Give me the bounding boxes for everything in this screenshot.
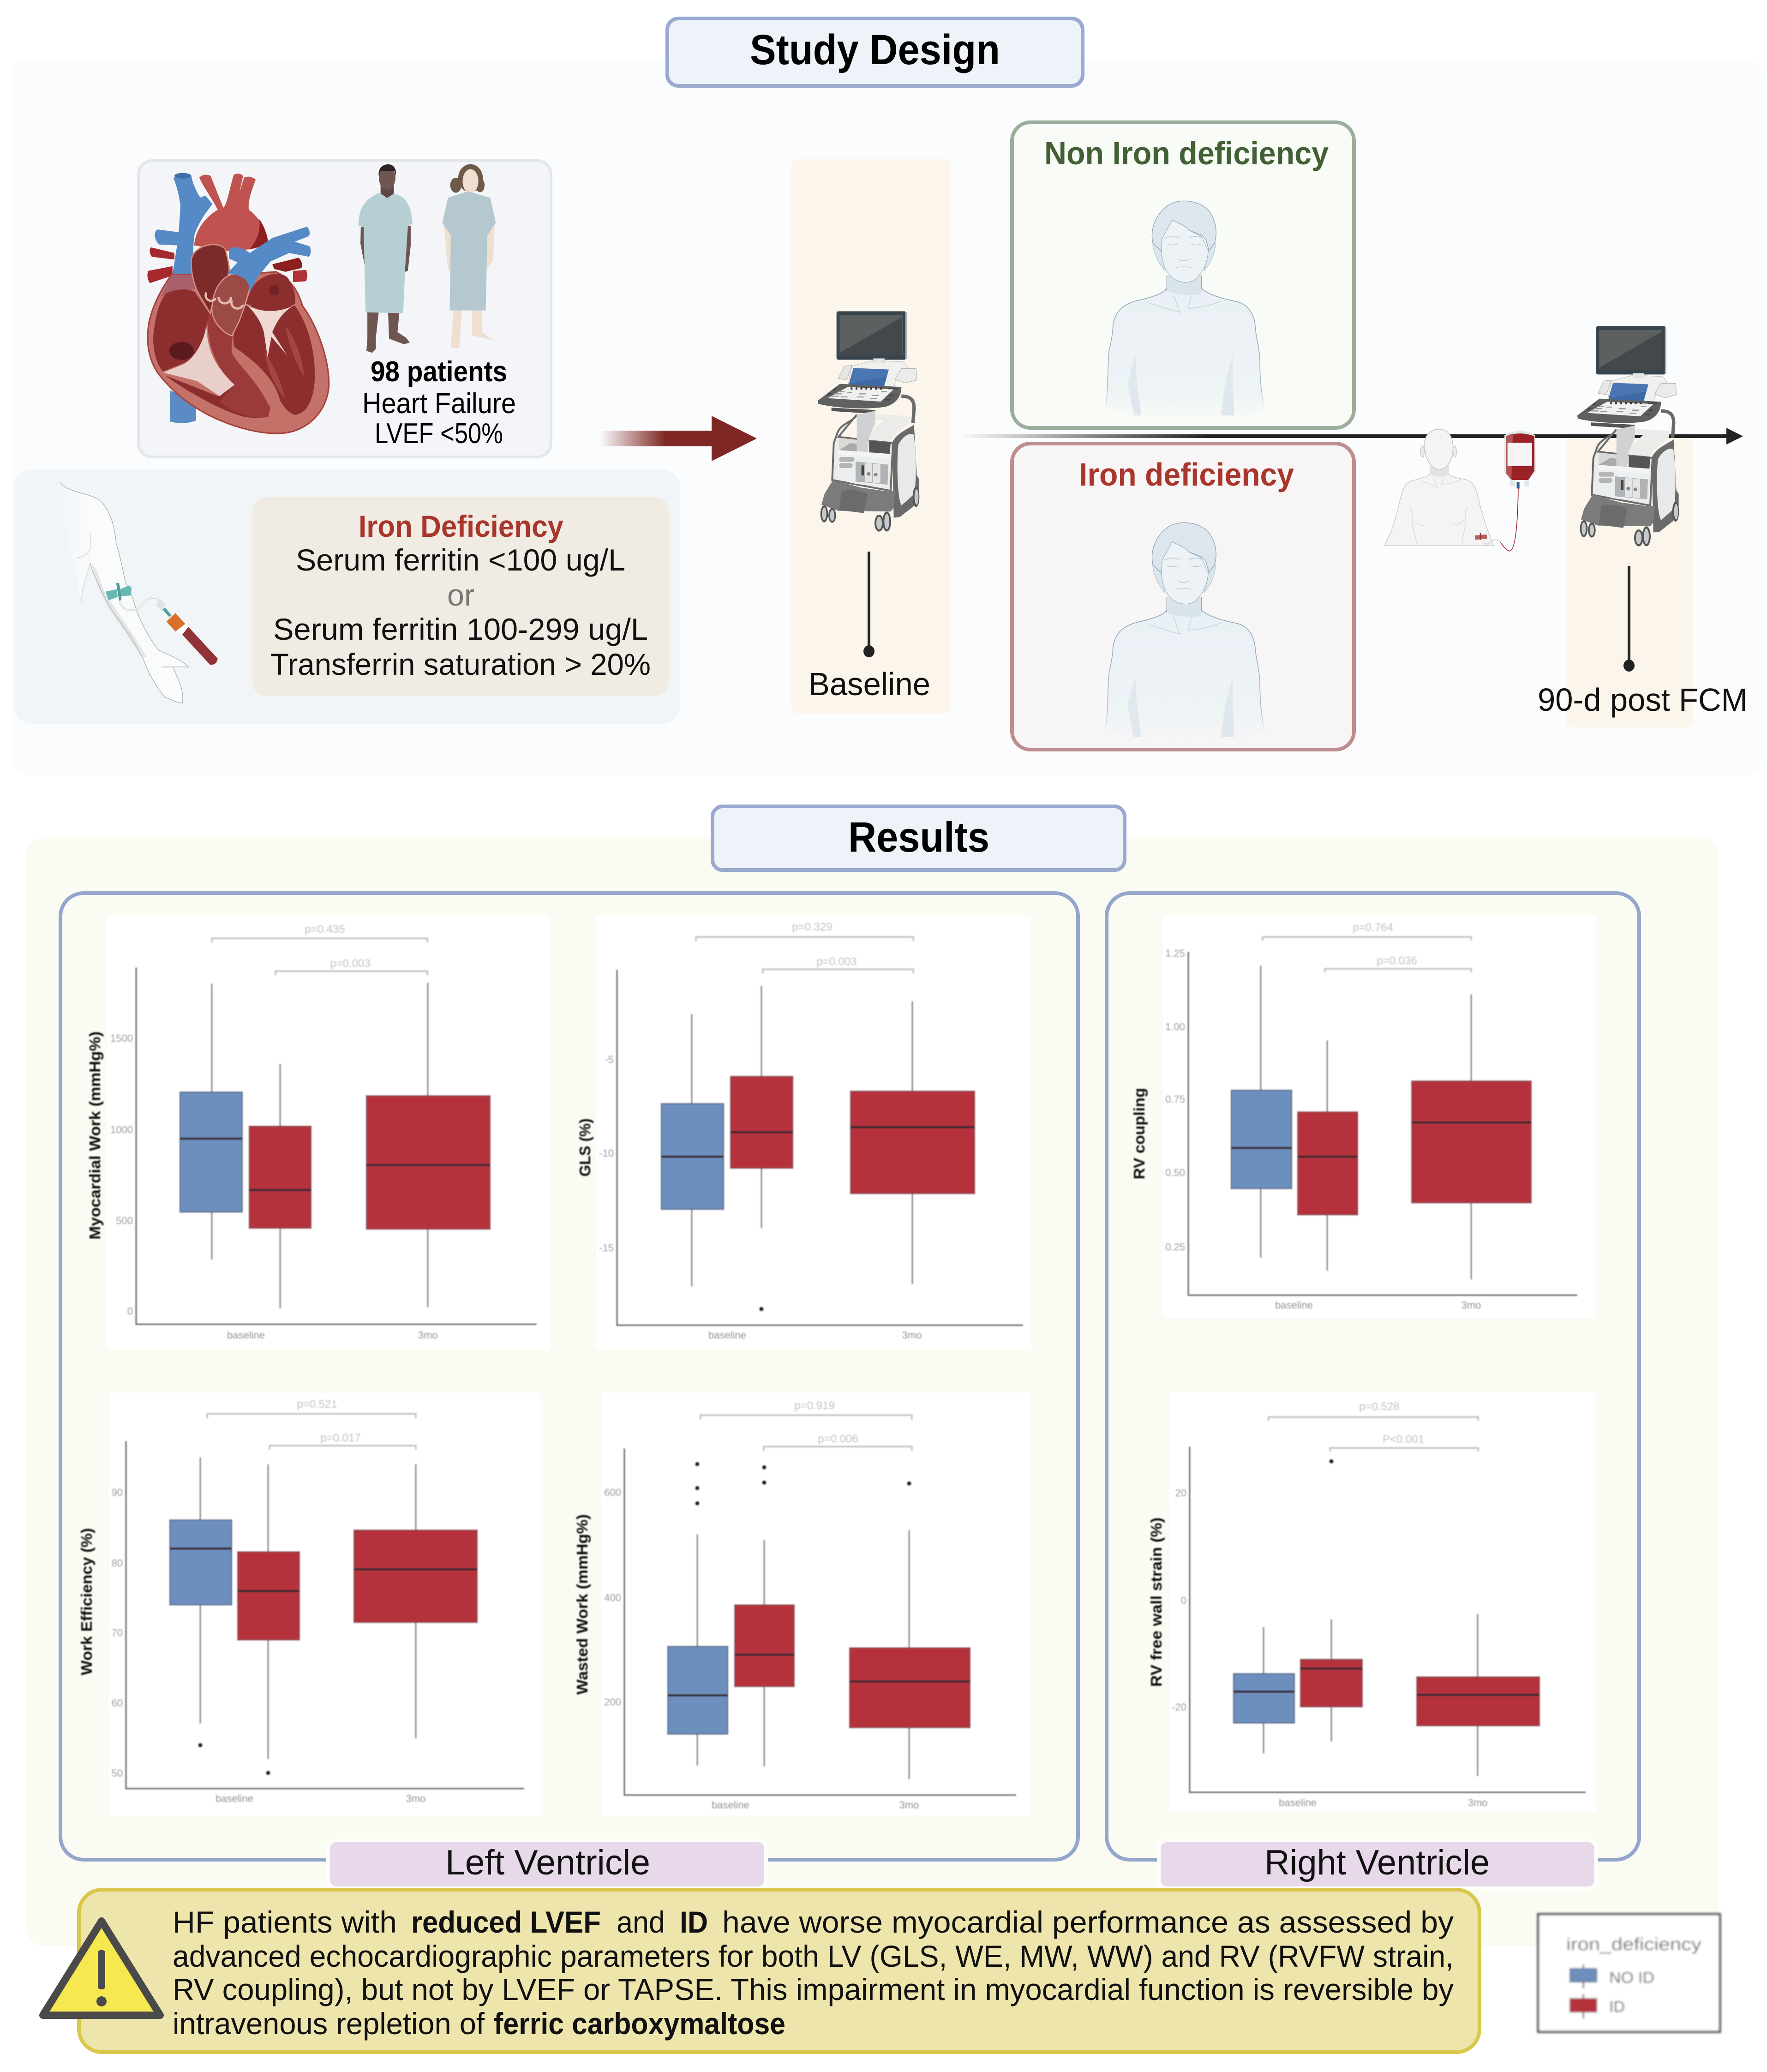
chart: work efficiency boxplot: 80 <box>112 1557 123 1569</box>
chart: myocardial work boxplot: 1000 <box>110 1124 133 1135</box>
chart: myocardial work boxplot: 0 <box>127 1305 133 1317</box>
chart: work efficiency boxplot: p=0.017 <box>320 1432 361 1444</box>
text: conclusion line 1: reduced LVEF <box>411 1905 601 1939</box>
chart: GLS boxplot: 3mo <box>902 1329 922 1341</box>
panel: iron deficiency group <box>1012 444 1354 750</box>
chart: GLS boxplot: GLS (%) <box>576 1118 593 1177</box>
chart: wasted work boxplot: p=0.006 <box>818 1433 858 1445</box>
panel: results background <box>26 837 1719 1946</box>
tag: Left Ventricle <box>326 1838 768 1890</box>
chart: myocardial work boxplot <box>86 915 550 1350</box>
icon: ultrasound machine 90 days <box>1577 326 1679 547</box>
icon: female patient in gown <box>442 164 496 348</box>
chart: work efficiency boxplot: baseline <box>216 1793 253 1804</box>
chart: wasted work boxplot: 600 <box>604 1487 621 1498</box>
text: conclusion line 4: ferric carboxymaltose <box>494 2006 785 2041</box>
chart: myocardial work boxplot: 500 <box>116 1215 133 1226</box>
legend: iron deficiency: iron_deficiency <box>1566 1935 1701 1954</box>
chart: wasted work boxplot: p=0.919 <box>794 1399 835 1412</box>
text: LVEF under 50%: LVEF <50% <box>375 418 503 450</box>
text: transferrin criterion: Transferrin saturation > 20% <box>270 647 651 681</box>
chart: work efficiency boxplot: 3mo <box>406 1793 425 1804</box>
chart: RV free wall strain boxplot: 3mo <box>1468 1797 1487 1808</box>
chart: RV coupling boxplot: baseline <box>1275 1299 1313 1311</box>
chart: RV free wall strain boxplot: P<0.001 <box>1383 1433 1424 1446</box>
text: conclusion line 1: ID <box>680 1905 708 1939</box>
icon: male patient in gown <box>359 164 413 353</box>
chart: RV coupling boxplot: p=0.036 <box>1377 955 1417 967</box>
chart: myocardial work boxplot: Myocardial Work (mmHg%) <box>86 1031 103 1240</box>
chart: RV free wall strain boxplot: p=0.528 <box>1359 1400 1400 1413</box>
chart: RV coupling boxplot: p=0.764 <box>1353 921 1393 934</box>
chart: myocardial work boxplot: 3mo <box>418 1329 437 1341</box>
chart: RV coupling boxplot: 1.00 <box>1165 1021 1185 1033</box>
icon: heart cross-section <box>147 173 329 433</box>
heading: Non Iron deficiency: Non Iron deficiency <box>1044 135 1329 171</box>
legend: iron deficiency: NO ID <box>1609 1969 1654 1987</box>
chart: GLS boxplot: p=0.003 <box>816 955 857 968</box>
chart: work efficiency boxplot: 90 <box>112 1487 123 1498</box>
panel: baseline column <box>791 159 951 714</box>
chart: work efficiency boxplot <box>78 1393 540 1816</box>
text: or: or <box>447 578 474 612</box>
text: conclusion line 2: advanced echocardiographic parameters for both LV (GLS, WE, MW, WW) and RV (RVFW strain, <box>173 1939 1454 1973</box>
text: ferritin range criterion: Serum ferritin 100-299 ug/L <box>273 612 648 646</box>
panel: 90-day column <box>1566 438 1693 727</box>
text: conclusion line 4: intravenous repletion of <box>173 2006 485 2041</box>
icon: person <box>1105 201 1264 419</box>
chart: RV free wall strain boxplot: baseline <box>1279 1797 1317 1808</box>
heading: Study Design: Study Design <box>750 26 1000 73</box>
chart: RV coupling boxplot: 0.25 <box>1165 1241 1185 1253</box>
heading: Study Design <box>667 18 1083 86</box>
panel: heart failure patients <box>138 161 551 457</box>
chart: wasted work boxplot <box>574 1393 1031 1816</box>
chart: GLS boxplot: -15 <box>599 1242 614 1254</box>
stem: 90-day marker <box>1623 566 1635 672</box>
legend: iron deficiency <box>1538 1914 1720 2032</box>
stem: baseline marker <box>863 552 875 657</box>
chart: GLS boxplot: baseline <box>708 1329 746 1341</box>
arrow: to baseline <box>600 416 757 461</box>
chart: RV coupling boxplot: RV coupling <box>1131 1088 1148 1179</box>
text: Iron Deficiency: Iron Deficiency <box>359 509 563 543</box>
chart: RV coupling boxplot: 0.50 <box>1165 1167 1185 1178</box>
icon: warning triangle <box>43 1921 160 2015</box>
panel: right ventricle frame <box>1107 893 1639 1860</box>
legend: iron deficiency: ID <box>1609 1998 1625 2016</box>
chart: work efficiency boxplot: 70 <box>112 1627 123 1639</box>
chart: GLS boxplot: -5 <box>605 1054 614 1065</box>
panel: non iron deficiency group <box>1012 122 1354 428</box>
chart: myocardial work boxplot: 1500 <box>110 1033 133 1044</box>
chart: wasted work boxplot: 400 <box>604 1592 621 1604</box>
heading: Iron deficiency: Iron deficiency <box>1079 456 1294 492</box>
chart: work efficiency boxplot: p=0.521 <box>297 1398 337 1411</box>
chart: myocardial work boxplot: p=0.003 <box>330 957 371 970</box>
chart: RV free wall strain boxplot: 0 <box>1181 1595 1186 1606</box>
heading: Results: Results <box>848 814 989 861</box>
label: Baseline: Baseline <box>809 666 930 702</box>
chart: wasted work boxplot: 3mo <box>899 1799 919 1811</box>
panel: study design background <box>11 58 1763 775</box>
tag: Left Ventricle: Left Ventricle <box>445 1843 650 1882</box>
text: conclusion line 1: and <box>617 1905 665 1939</box>
text: conclusion line 1: have worse myocardial performance as assessed by <box>722 1905 1454 1939</box>
chart: wasted work boxplot: baseline <box>712 1799 749 1811</box>
tag: Right Ventricle <box>1157 1838 1598 1890</box>
text: conclusion line 1: HF patients with <box>173 1905 397 1939</box>
label: 90-d post FCM: 90-d post FCM <box>1538 682 1748 718</box>
tag: Right Ventricle: Right Ventricle <box>1264 1843 1490 1882</box>
icon: person <box>1105 523 1264 740</box>
panel: iron deficiency definition <box>14 469 680 724</box>
chart: myocardial work boxplot: p=0.435 <box>305 923 345 936</box>
chart: RV coupling boxplot: 3mo <box>1462 1299 1481 1311</box>
chart: wasted work boxplot: Wasted Work (mmHg%) <box>574 1514 591 1695</box>
text: Heart Failure: Heart Failure <box>362 388 516 420</box>
chart: RV free wall strain boxplot: 20 <box>1175 1487 1186 1499</box>
icon: ultrasound machine baseline <box>818 311 919 532</box>
chart: RV free wall strain boxplot: RV free wall strain (%) <box>1148 1518 1165 1687</box>
chart: work efficiency boxplot: Work Efficiency (%) <box>78 1528 95 1676</box>
arrow: timeline <box>960 428 1743 444</box>
chart: GLS boxplot: -10 <box>599 1147 614 1159</box>
text: ferritin criterion: Serum ferritin <100 ug/L <box>296 543 625 577</box>
text: conclusion line 3: RV coupling), but not by LVEF or TAPSE. This impairment in myocardial function is reversible by <box>173 1972 1454 2006</box>
callout: conclusion <box>79 1890 1479 2052</box>
chart: RV coupling boxplot: 1.25 <box>1165 948 1185 959</box>
chart: RV coupling boxplot <box>1131 915 1596 1318</box>
panel: left ventricle frame <box>60 893 1078 1860</box>
chart: wasted work boxplot: 200 <box>604 1696 621 1708</box>
chart: myocardial work boxplot: baseline <box>227 1329 265 1341</box>
chart: work efficiency boxplot: 60 <box>112 1697 123 1709</box>
chart: GLS boxplot <box>576 915 1031 1350</box>
heading: Results <box>713 806 1125 870</box>
chart: GLS boxplot: p=0.329 <box>792 921 833 933</box>
chart: RV coupling boxplot: 0.75 <box>1165 1093 1185 1105</box>
text: 98 patients: 98 patients <box>371 356 507 388</box>
icon: patient receiving infusion <box>1384 429 1536 551</box>
icon: arm blood draw <box>60 482 218 703</box>
chart: RV free wall strain boxplot <box>1148 1392 1596 1811</box>
chart: RV free wall strain boxplot: -20 <box>1172 1701 1186 1713</box>
chart: work efficiency boxplot: 50 <box>112 1767 123 1779</box>
